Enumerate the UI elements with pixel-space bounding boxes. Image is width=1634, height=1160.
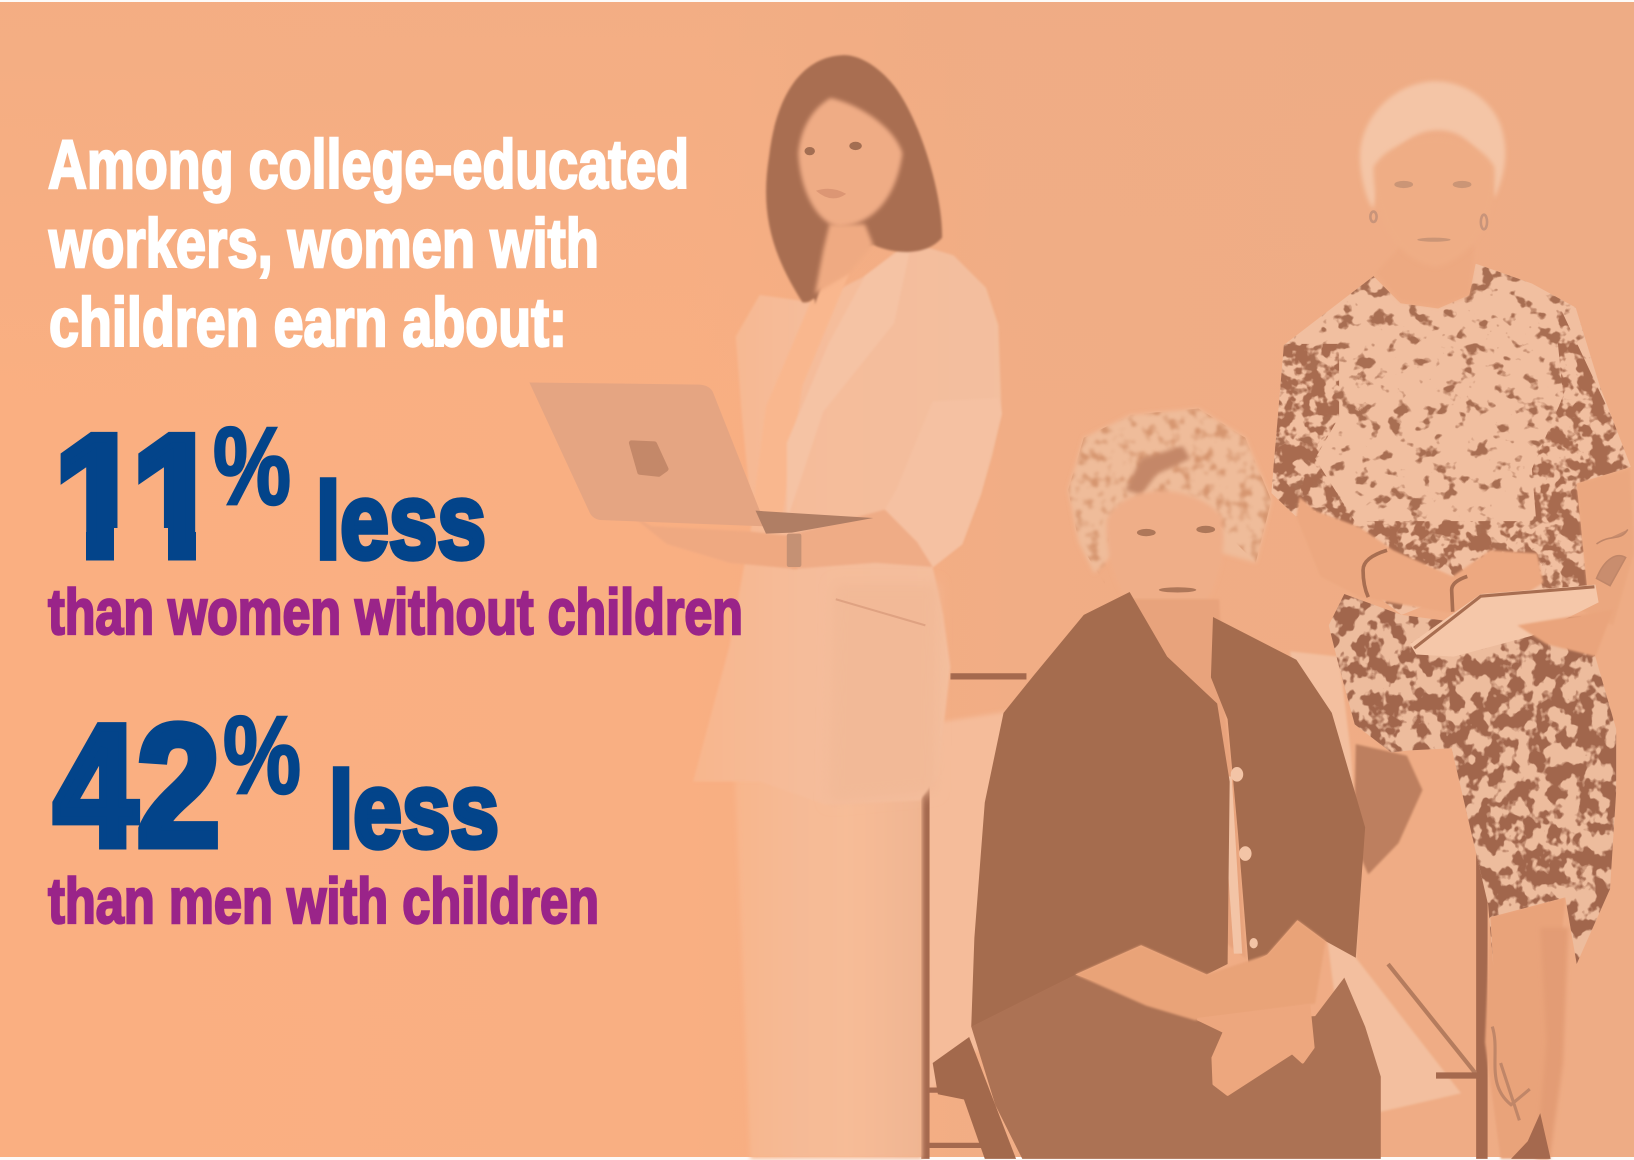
trousers xyxy=(735,771,922,1159)
notebook xyxy=(1410,585,1599,657)
earrings xyxy=(1370,212,1487,229)
jacket xyxy=(693,242,1001,805)
dress skirt xyxy=(1329,594,1616,964)
stat: 11% less xyxy=(60,426,485,562)
hair xyxy=(1360,81,1505,208)
stat: 11% less: less xyxy=(316,460,486,581)
eyes and mouth xyxy=(805,142,862,155)
standing woman with patterned dress xyxy=(1266,81,1634,1159)
neck xyxy=(815,224,873,294)
caption: than men with children: than men with children xyxy=(48,865,599,937)
shoe xyxy=(1511,1113,1551,1159)
pillow behind seated woman xyxy=(925,709,1026,1094)
lapel xyxy=(787,242,912,521)
notebook edge xyxy=(1414,587,1594,648)
photo: three women xyxy=(529,55,1634,1159)
sleeve fold xyxy=(885,398,1001,567)
hand xyxy=(625,511,797,569)
dress top xyxy=(1266,261,1634,615)
dark skirt xyxy=(971,974,1381,1159)
heading xyxy=(48,126,689,361)
right arm xyxy=(1296,497,1543,617)
face xyxy=(1373,137,1495,267)
heading: children earn about: xyxy=(49,284,567,361)
hand xyxy=(1198,1006,1313,1094)
seated woman xyxy=(933,401,1381,1159)
dark shirt xyxy=(971,592,1365,1027)
buttons xyxy=(1231,767,1258,948)
neck xyxy=(1376,245,1475,306)
hair xyxy=(1068,408,1272,572)
tattoo xyxy=(1492,1027,1530,1120)
stat: 42% less: 42 xyxy=(54,690,220,882)
eyes and mouth xyxy=(1137,526,1215,592)
inner top xyxy=(752,273,849,521)
brown cloth xyxy=(1355,744,1422,874)
dark sleeve and waist pattern xyxy=(1273,310,1629,589)
laptop xyxy=(529,382,873,534)
laptop logo xyxy=(632,443,666,474)
stat: 42% less: % xyxy=(223,694,301,817)
stat: 11% less: % xyxy=(213,405,291,528)
second leg shading xyxy=(1536,928,1568,1159)
stat: 42% less xyxy=(54,690,499,882)
pocket line xyxy=(836,599,925,625)
heading: Among college-educated xyxy=(48,126,689,203)
bracelets xyxy=(1363,550,1467,612)
laptop base xyxy=(756,511,873,534)
jacket shading xyxy=(828,584,938,802)
forearm tattoo xyxy=(1596,529,1628,586)
facial features xyxy=(1394,181,1471,242)
shirt strip xyxy=(1221,776,1242,954)
seat xyxy=(933,1037,1016,1159)
dark hair patch xyxy=(1125,446,1190,495)
neck and chest xyxy=(1131,599,1246,959)
face xyxy=(798,98,902,227)
stat: 42% less: less xyxy=(329,749,499,870)
caption: than women without children: than women without children xyxy=(48,576,743,648)
face xyxy=(1107,491,1224,631)
arm xyxy=(1075,920,1326,1020)
woman standing with laptop xyxy=(529,55,1001,1159)
watch xyxy=(787,534,801,567)
stat: 11% less: 11 xyxy=(55,401,219,592)
hair back xyxy=(766,55,942,304)
forearm xyxy=(779,510,933,569)
heading: workers, women with xyxy=(48,205,599,282)
leg xyxy=(1485,897,1565,1159)
hand on notebook xyxy=(1517,610,1613,657)
chair xyxy=(925,676,1482,1159)
left forearm xyxy=(1568,469,1634,625)
